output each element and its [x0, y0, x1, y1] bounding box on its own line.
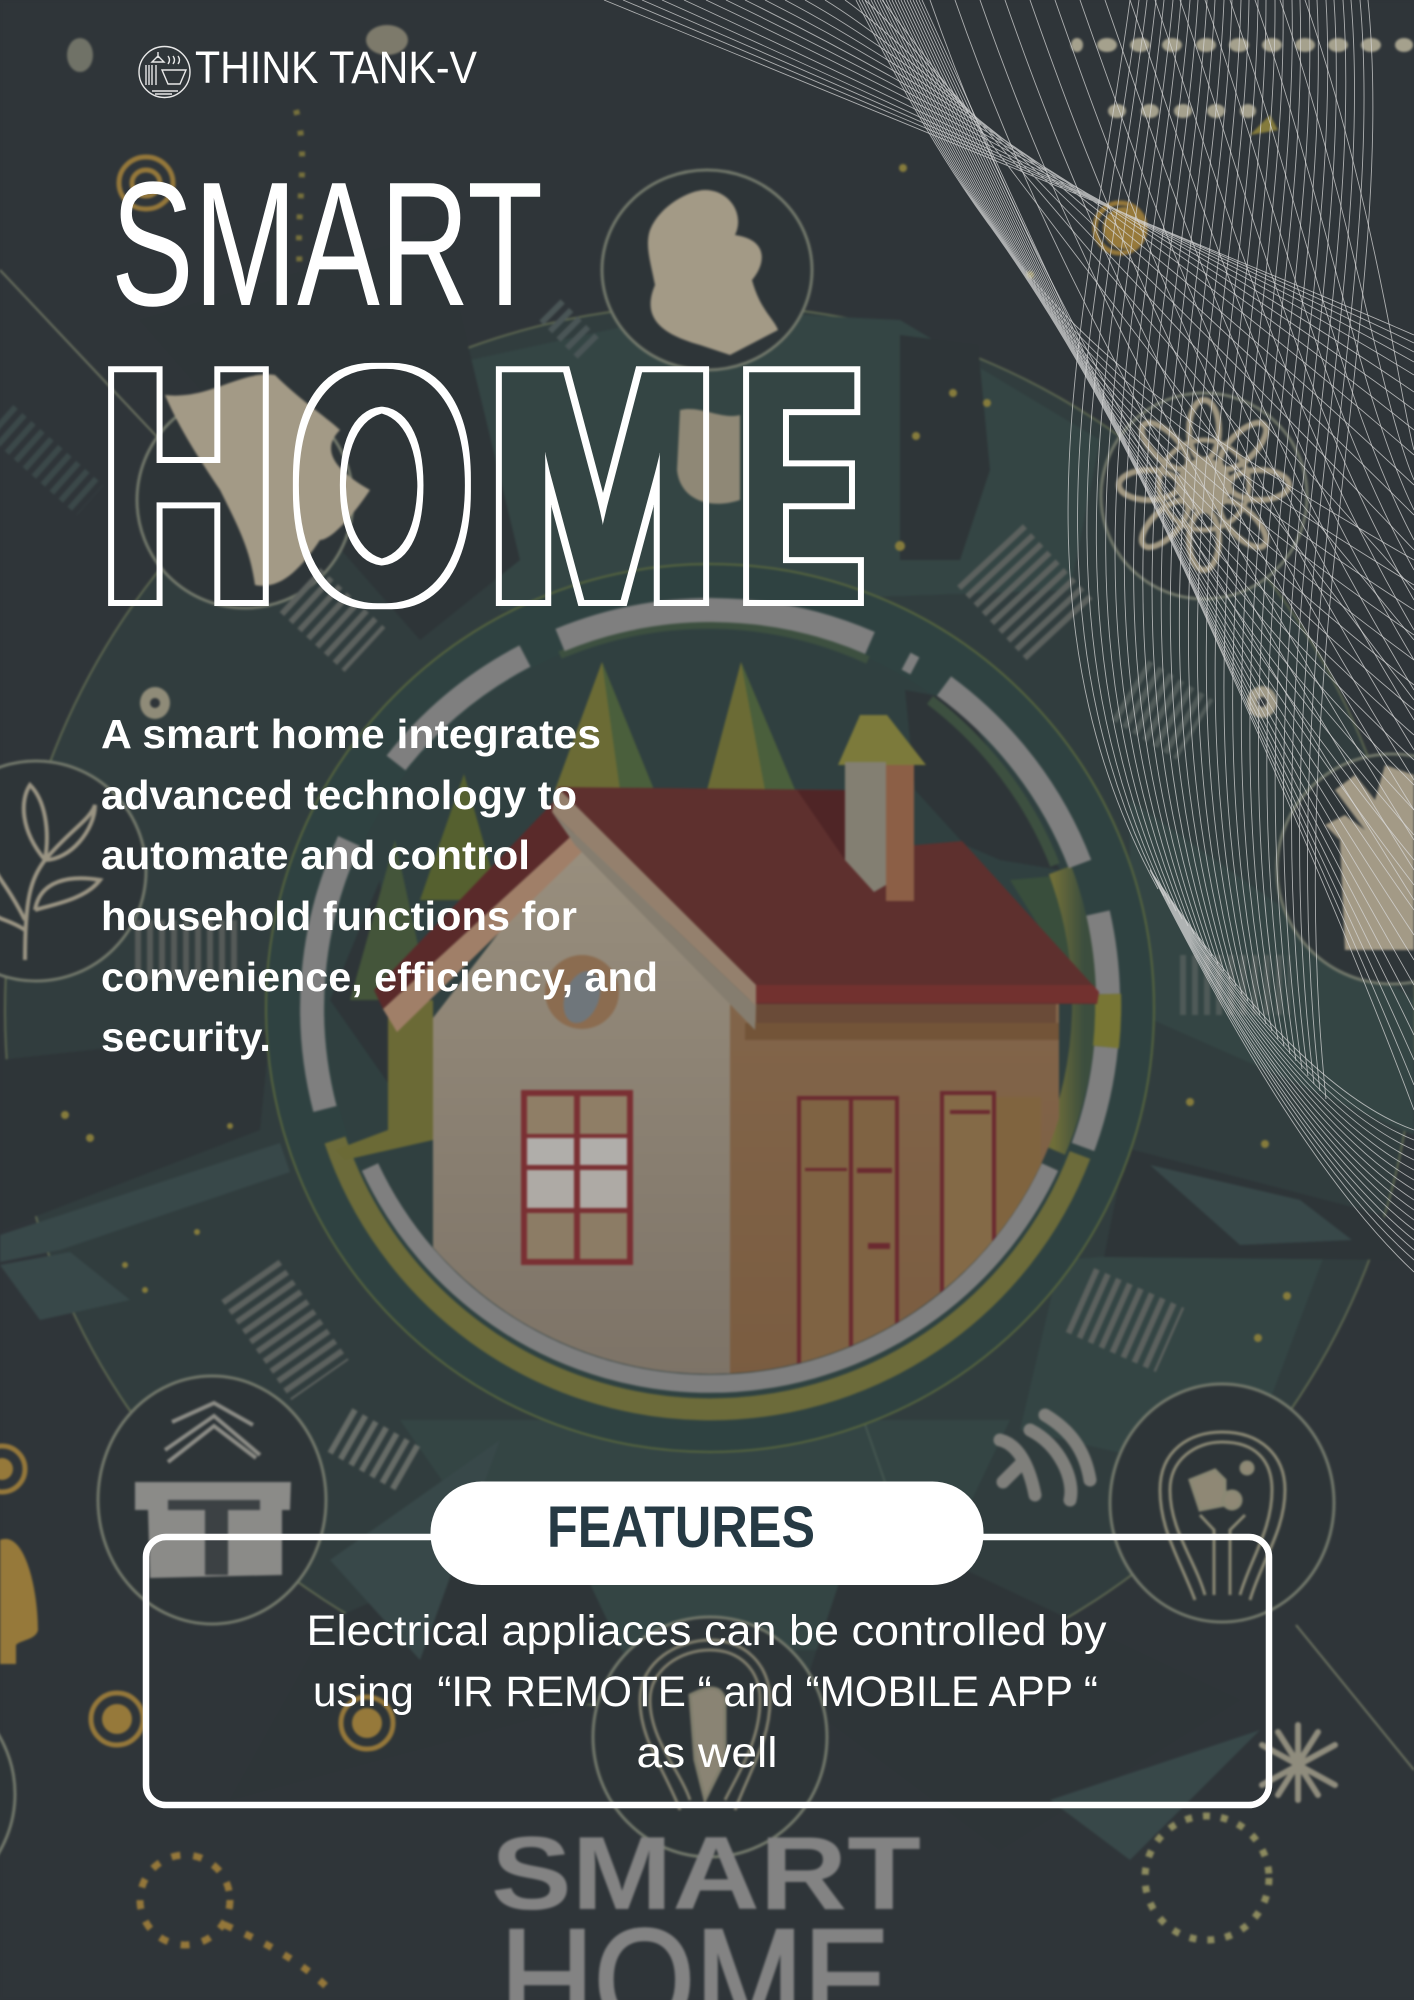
dark sky — [326, 624, 1094, 1392]
teal sectors — [400, 310, 1414, 1650]
chimney — [838, 715, 926, 901]
title: HOME outlined: O — [294, 302, 470, 671]
hatch stripes — [0, 310, 1290, 1470]
description paragraph: A smart home integrates — [101, 711, 601, 757]
house walls — [433, 820, 1059, 1400]
window — [521, 1090, 633, 1265]
description paragraph: security. — [101, 1014, 271, 1060]
description paragraph: convenience, efficiency, and — [101, 954, 658, 1000]
icon: mid blob — [677, 409, 740, 504]
icon: plant — [0, 785, 100, 960]
gray strokes icon — [1000, 1415, 1090, 1500]
features text: using “IR REMOTE “ and “MOBILE APP “ — [313, 1668, 1098, 1716]
logo icon — [139, 46, 190, 98]
panel: outer teal disk — [5, 305, 1414, 1715]
title: HOME outlined — [102, 300, 861, 671]
description paragraph: advanced technology to — [101, 772, 577, 818]
teal smears — [0, 1143, 1352, 1860]
description paragraph — [101, 711, 658, 1060]
features text — [306, 1607, 1107, 1777]
title: SMART: SMART — [111, 145, 543, 343]
icon: right bulb — [1160, 1432, 1285, 1600]
panel: features box — [146, 1482, 1269, 1805]
title: HOME outlined: M — [487, 300, 718, 671]
description paragraph: household functions for — [101, 893, 577, 939]
description paragraph: automate and control — [101, 832, 530, 878]
icon: center bulb — [640, 1640, 770, 1810]
gold scatter — [61, 115, 1291, 1342]
gold accents — [0, 157, 1145, 1749]
round window — [545, 955, 619, 1029]
title: HOME outlined: H — [102, 302, 275, 671]
inner ring disk — [266, 564, 1154, 1452]
doors — [799, 1093, 994, 1398]
dots — [67, 25, 1413, 719]
title: HOME outlined: E — [741, 302, 861, 671]
features text: Electrical appliaces can be controlled by — [306, 1607, 1107, 1655]
brand name: THINK TANK-V — [195, 42, 477, 93]
roof — [374, 787, 1099, 1032]
features pill — [430, 1482, 984, 1585]
white-gray bottom arc — [370, 1167, 1050, 1384]
dotted gold paths — [140, 110, 1269, 1990]
gray dash ring — [312, 610, 1108, 1147]
icon: sun — [1119, 400, 1289, 570]
wave mesh lines — [604, 0, 1414, 1272]
house medallion — [266, 564, 1154, 1452]
features heading: FEATURES — [547, 1495, 815, 1560]
background title: smart: SMART — [491, 1816, 921, 1932]
connector lines — [0, 270, 1414, 1770]
features text: as well — [636, 1729, 778, 1777]
icon: left blob — [165, 374, 370, 586]
icon: star — [1262, 1725, 1335, 1800]
icon: right house blob — [1325, 765, 1414, 950]
icon: building — [135, 1403, 291, 1578]
olive arcs — [335, 1140, 1080, 1409]
icon: top blob — [648, 190, 778, 355]
trees — [335, 662, 795, 1160]
